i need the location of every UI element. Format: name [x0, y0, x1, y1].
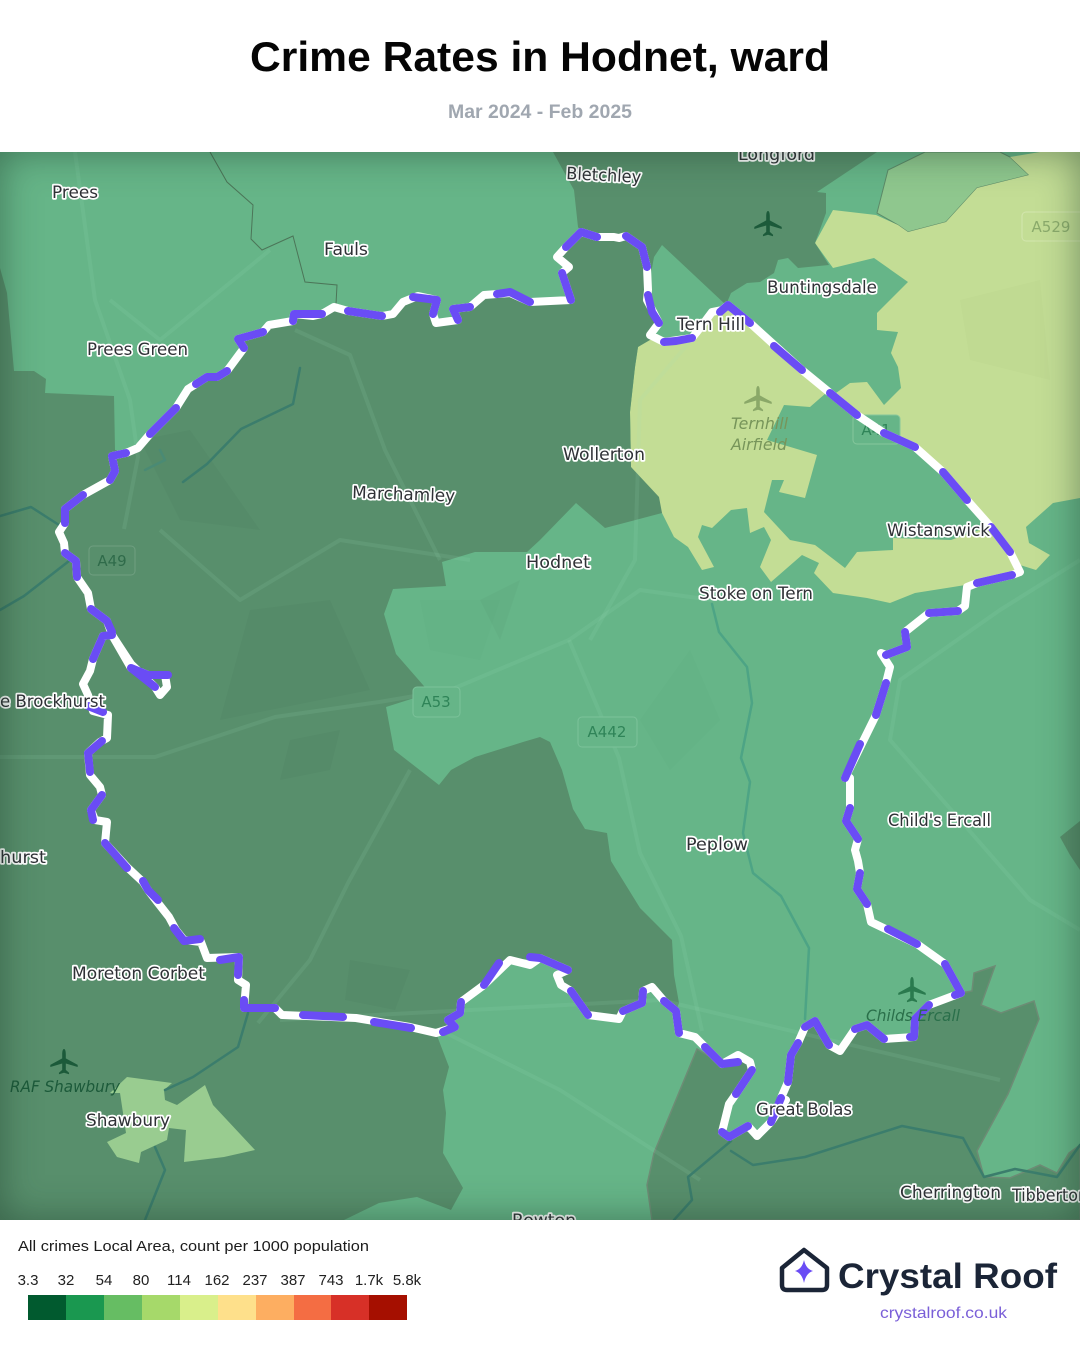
place labels: Great Bolas — [756, 1100, 852, 1120]
road sign: A41: A41 — [861, 421, 891, 439]
legend scale values: 162 — [204, 1272, 230, 1289]
legend scale values: 5.8k — [393, 1272, 422, 1289]
place labels: Moreton Corbet — [72, 964, 205, 984]
icon: airport Ternhill — [744, 386, 772, 411]
place labels: Stoke on Tern — [699, 584, 813, 604]
area: pale yellow-green Ternhill — [630, 152, 1080, 603]
place labels: Child's Ercall — [888, 811, 991, 831]
legend scale values: 1.7k — [355, 1272, 384, 1289]
legend scale values: 32 — [58, 1272, 74, 1289]
road sign: A442 — [578, 717, 637, 747]
area: dark green main — [0, 152, 877, 1220]
place labels: Bletchley — [566, 164, 642, 188]
icon: airport north — [754, 211, 782, 236]
place labels: Peplow — [686, 835, 748, 855]
website: crystalroof.co.uk — [880, 1305, 1008, 1322]
road sign: A53: A53 — [421, 693, 451, 711]
road sign: A442: A442 — [588, 723, 626, 741]
place labels: Wistanswick — [887, 521, 990, 541]
place labels: Wollerton — [563, 445, 645, 465]
road sign: A53 — [413, 687, 460, 717]
legend scale values: 387 — [280, 1272, 306, 1289]
area: dark green south-east — [647, 966, 1080, 1220]
legend scale values — [18, 1272, 422, 1289]
place labels: Marchamley — [352, 483, 455, 507]
map background: light green area — [0, 152, 1080, 1220]
woodland texture patches — [140, 280, 1050, 1010]
area: green patch within Ternhill — [764, 393, 988, 568]
place labels: e Brockhurst — [0, 692, 105, 712]
road sign: A49 — [89, 546, 135, 575]
legend scale values: 743 — [318, 1272, 344, 1289]
title: Crime Rates in Hodnet, ward — [250, 33, 830, 80]
legend scale values: 237 — [242, 1272, 268, 1289]
ward boundary: white base line — [59, 232, 1020, 1137]
legend scale values: 54 — [96, 1272, 112, 1289]
logo: Crystal Roof — [782, 1250, 1057, 1322]
area: north-east mid green — [877, 152, 1029, 232]
place labels: Buntingsdale — [767, 278, 877, 298]
place labels: Cherrington — [900, 1183, 1001, 1203]
ward boundary: purple dashes — [65, 232, 1012, 1137]
area: dark green right edge — [1060, 821, 1080, 870]
road sign: A41 — [853, 415, 900, 444]
place labels: Shawbury — [86, 1111, 170, 1131]
legend colour swatches — [28, 1295, 407, 1320]
place labels: Rowton — [512, 1211, 576, 1231]
place labels: Fauls — [324, 240, 368, 260]
road sign: A529: A529 — [1032, 218, 1070, 236]
icon: airport RAF Shawbury — [50, 1049, 78, 1074]
area: Shawbury — [107, 1077, 255, 1163]
place labels: Hodnet — [526, 553, 590, 573]
legend title: All crimes Local Area, count per 1000 population — [18, 1238, 369, 1255]
place labels: Childs Ercall — [866, 1006, 961, 1025]
legend — [18, 1238, 422, 1320]
brand name: Crystal Roof — [838, 1257, 1057, 1296]
rivers — [0, 368, 1080, 1220]
place labels: RAF Shawbury — [10, 1077, 120, 1096]
icon: house with star — [782, 1250, 827, 1290]
road sign: A49: A49 — [97, 552, 127, 570]
legend scale values: 3.3 — [18, 1272, 38, 1289]
place labels: Prees Green — [87, 340, 188, 360]
place labels: Prees — [52, 183, 98, 203]
place labels: Tern Hill — [676, 315, 745, 335]
road sign: A529 — [1022, 212, 1080, 241]
place labels: Ternhill — [731, 414, 789, 433]
district border line — [210, 152, 337, 304]
roads — [16, 328, 1000, 1181]
place labels: Airfield — [730, 435, 788, 454]
legend scale values: 114 — [167, 1272, 191, 1289]
subtitle: date range: Mar 2024 - Feb 2025 — [448, 102, 632, 123]
icon: airport Childs Ercall — [898, 977, 926, 1002]
place labels: Longford — [738, 145, 815, 165]
place labels: hurst — [0, 848, 46, 868]
legend scale values: 80 — [133, 1272, 149, 1289]
